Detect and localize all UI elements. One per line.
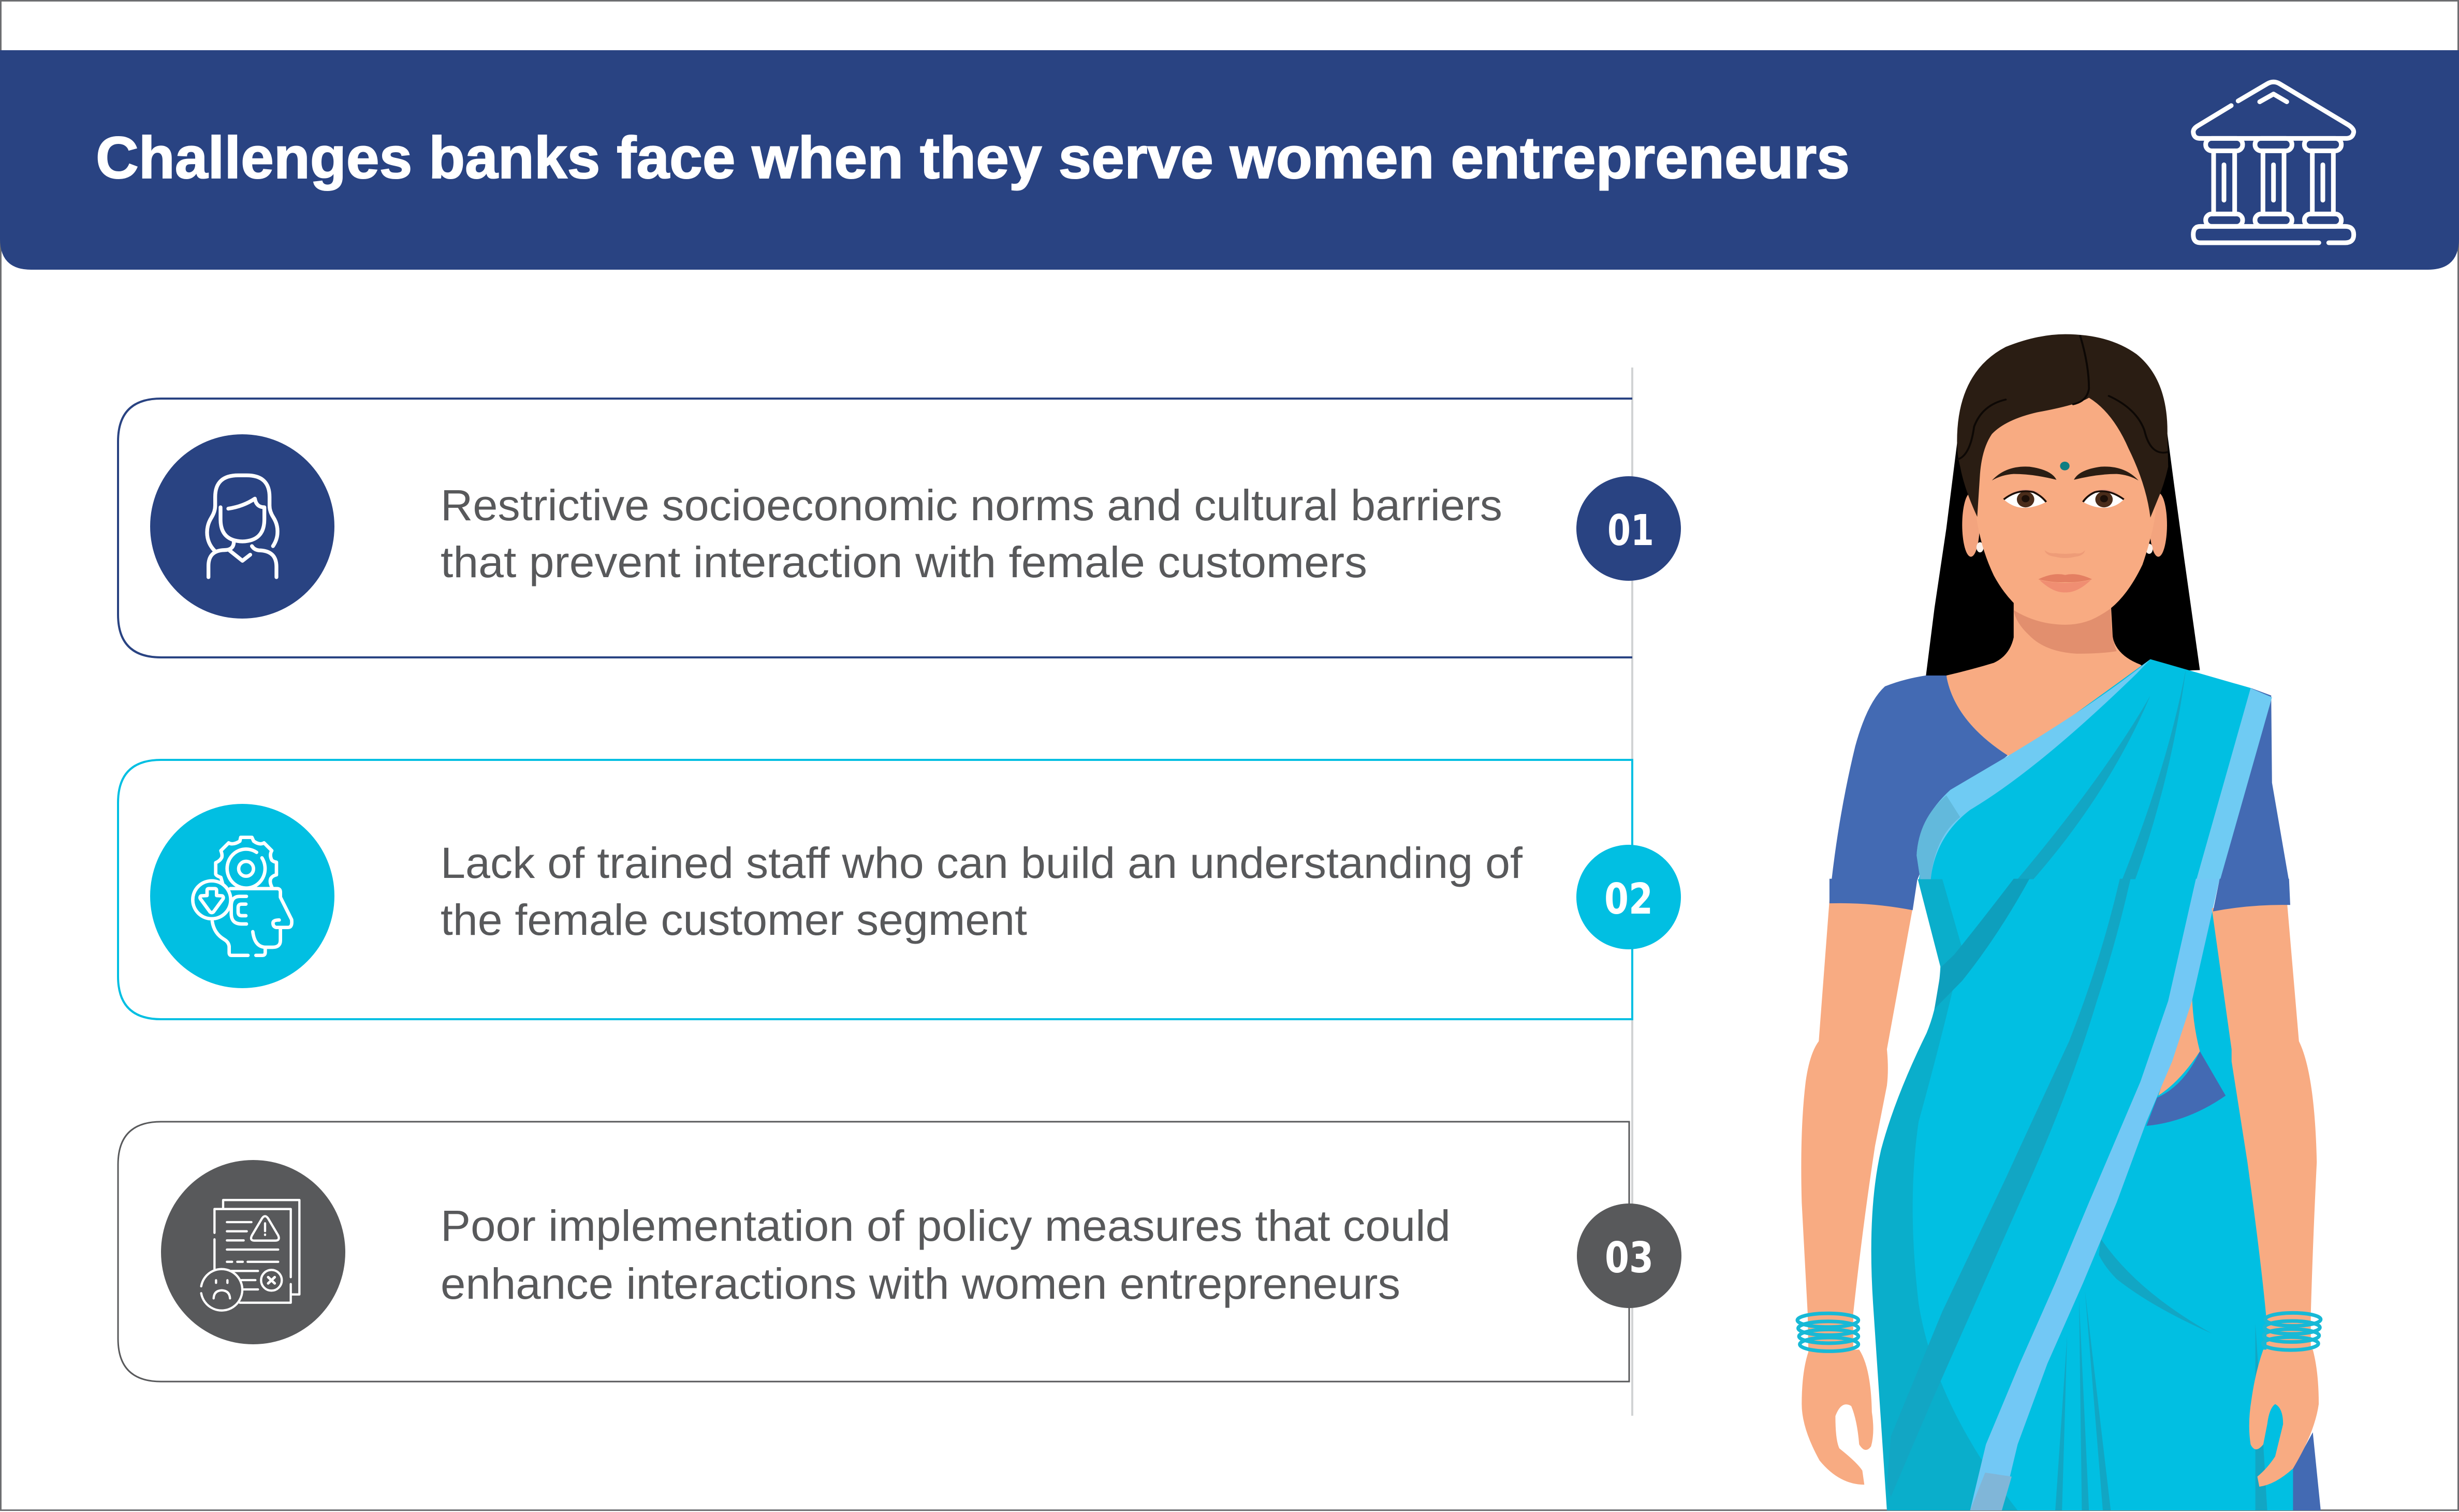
title: Challenges banks face when they serve women entrepreneurs (96, 125, 1850, 191)
icon: woman in navy circle (150, 434, 334, 619)
number badge 01 (1576, 476, 1681, 581)
panel: challenge 01 (118, 399, 1681, 657)
panel: challenge 03 (118, 1122, 1681, 1382)
text: challenge 03: Poor implementation of policy measures that could (441, 1201, 1451, 1250)
vertical timeline line (1631, 368, 1633, 1416)
number badge 03 (1577, 1203, 1681, 1308)
upper body: head, hair, blouse, saree drape (1832, 334, 2289, 882)
illustration: woman in blue saree (1797, 334, 2321, 1510)
number badge 03: 03 (1605, 1234, 1653, 1283)
lower body: arms, saree skirt, bangles (1797, 879, 2321, 1510)
text: challenge 03 (441, 1201, 1451, 1308)
text: challenge 01: that prevent interaction with female customers (441, 538, 1367, 586)
text: challenge 01: Restrictive socioeconomic norms and cultural barriers (441, 481, 1502, 530)
icon: head with gear in cyan circle (150, 804, 334, 988)
text: challenge 02 (441, 839, 1523, 944)
panel: challenge 02 (118, 760, 1681, 1019)
text: challenge 02: the female customer segment (441, 896, 1027, 944)
number badge 01: 01 (1607, 506, 1654, 555)
number badge 02 (1576, 845, 1681, 949)
icon: bank building (2193, 82, 2354, 243)
icon: document warning in grey circle (161, 1160, 345, 1344)
text: challenge 03: enhance interactions with women entrepreneurs (441, 1259, 1400, 1308)
text: challenge 02: Lack of trained staff who can build an understanding of (441, 839, 1523, 887)
text: challenge 01 (441, 481, 1502, 586)
header banner (0, 50, 2459, 270)
number badge 02: 02 (1604, 875, 1653, 924)
